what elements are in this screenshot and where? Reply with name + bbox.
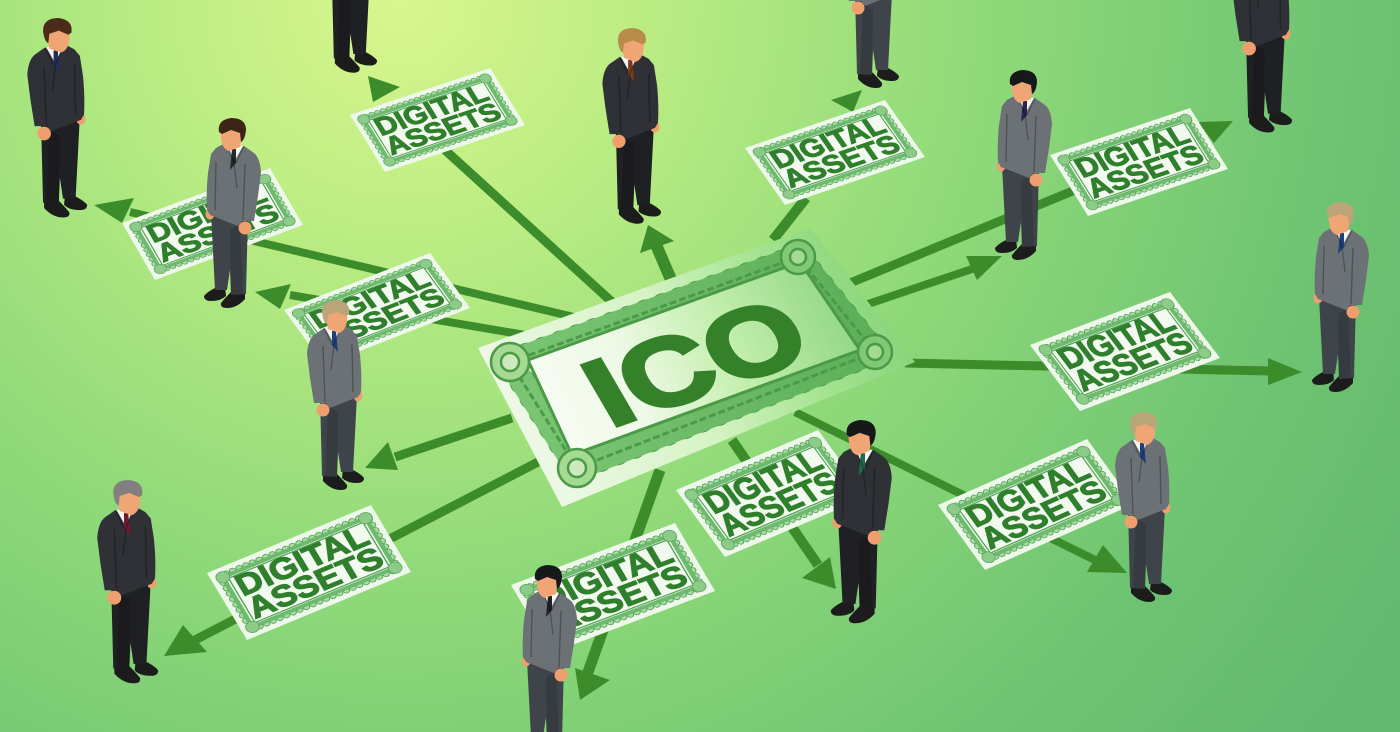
ICO central certificate — [478, 228, 915, 507]
digital assets bill: upper left: ASSETS — [152, 199, 284, 268]
digital assets bill: bottom centre: DIGITAL — [533, 537, 680, 616]
corner rosette — [858, 335, 892, 369]
person: top right, dark suit — [1232, 0, 1292, 132]
digital assets bill: middle left: DIGITAL — [304, 265, 437, 334]
person: top edge, dark suit — [318, 0, 377, 73]
digital assets bill: right: DIGITAL — [1050, 304, 1182, 376]
person: grey suit, brown hair — [204, 118, 261, 308]
arrow: to far right person — [905, 358, 1302, 385]
person: top edge, grey suit — [842, 0, 899, 88]
corner rosette — [558, 449, 596, 487]
corner rosette — [491, 343, 529, 381]
arrow: to lower left person — [164, 462, 538, 656]
person: bottom left, dark suit — [97, 480, 158, 683]
digital assets bill: top centre: DIGITAL — [368, 78, 494, 141]
digital assets bill: top right of centre: ASSETS — [777, 130, 907, 194]
digital assets bill: top centre: ASSETS — [379, 97, 507, 160]
digital assets bill: top right of centre — [745, 100, 925, 205]
digital assets bill: upper right: ASSETS — [1081, 140, 1210, 204]
person: left, grey suit — [307, 300, 364, 490]
person: grey suit, black hair — [995, 70, 1052, 260]
arrow: to blond person — [640, 225, 674, 282]
person: blond, dark suit — [602, 28, 661, 224]
digital assets bill: top right of centre: DIGITAL — [765, 112, 892, 175]
digital assets bill: upper right: DIGITAL — [1070, 120, 1196, 184]
arrow: to lower centre person — [732, 440, 836, 589]
person: bottom, grey suit — [520, 565, 577, 732]
person: top left, dark suit — [27, 18, 87, 217]
digital assets bill: top centre — [350, 68, 525, 172]
person: lower right, grey suit — [1115, 412, 1172, 602]
digital assets bill: lower centre: ASSETS — [711, 465, 847, 543]
arrow: to left grey suit person — [365, 418, 512, 470]
digital assets bill: middle left — [284, 253, 470, 365]
digital assets bill: upper right — [1050, 108, 1228, 216]
digital assets bill: right — [1030, 292, 1220, 411]
person: far right, grey suit — [1312, 202, 1369, 392]
digital assets bill: lower left: DIGITAL — [229, 520, 376, 603]
arrows radiating from ICO bill — [94, 76, 1302, 700]
digital assets bill: lower left — [207, 505, 411, 640]
person: lower centre, dark suit — [831, 420, 892, 623]
corner rosette — [781, 240, 815, 274]
arrow: to top person right of centre — [773, 90, 862, 240]
ICO label: ICO — [564, 277, 827, 447]
digital assets bill: upper left: DIGITAL — [142, 181, 272, 249]
arrow: to middle left — [255, 284, 525, 335]
digital assets bill: lower right — [938, 439, 1134, 570]
arrow: to lower right person — [795, 412, 1127, 573]
digital assets bill: lower right: ASSETS — [973, 474, 1113, 555]
digital assets bill: lower left: ASSETS — [241, 541, 390, 626]
arrow: to top centre person — [368, 76, 612, 302]
digital assets bill: bottom centre: ASSETS — [545, 559, 694, 639]
digital assets bill: upper left — [122, 168, 303, 280]
arrow: to top right person — [850, 121, 1233, 283]
arrow: to bottom person — [575, 470, 660, 700]
digital assets bill: lower right: DIGITAL — [959, 453, 1097, 533]
digital assets bill: right: ASSETS — [1065, 325, 1200, 398]
digital assets bill: lower centre — [676, 430, 867, 557]
arrow: to grey suit person — [868, 256, 1002, 304]
digital assets bill: lower centre: DIGITAL — [696, 443, 830, 520]
arrow: to top left person — [94, 198, 578, 318]
digital assets bill: middle left: ASSETS — [316, 283, 451, 353]
digital assets bill: bottom centre — [511, 523, 715, 653]
